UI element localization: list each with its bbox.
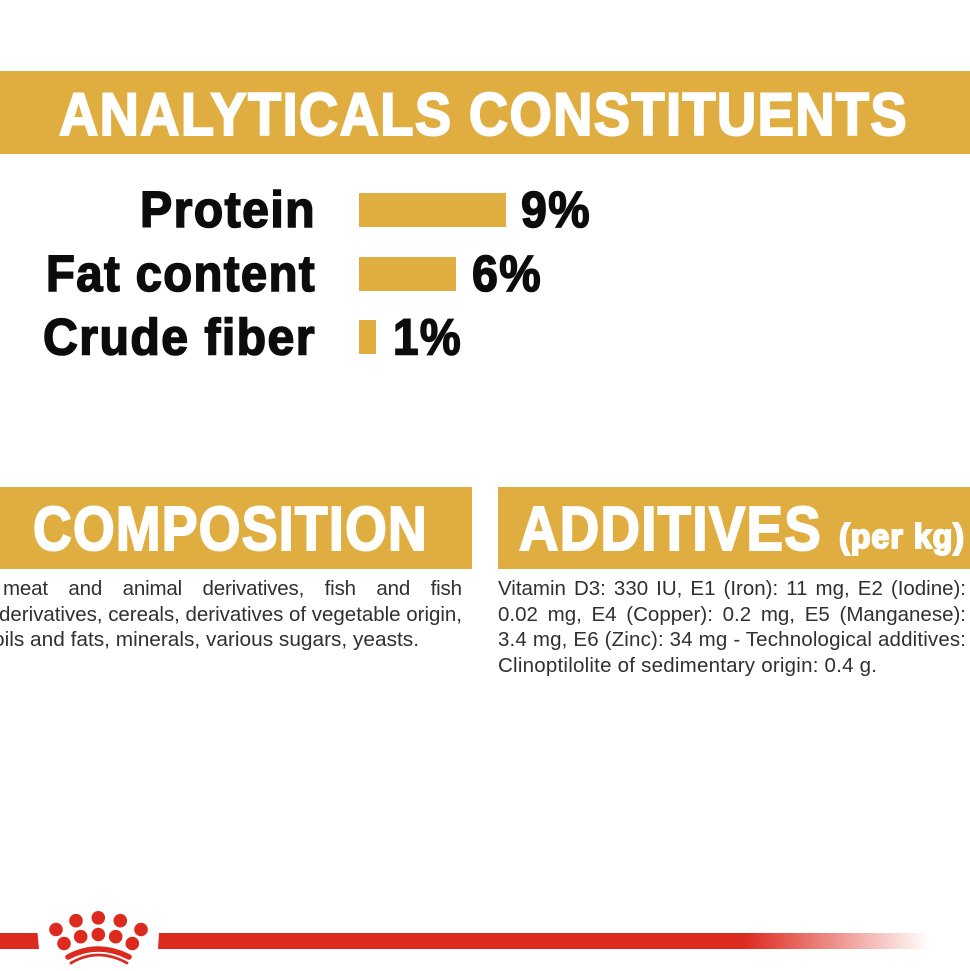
bar chart: constituents — [43, 181, 591, 366]
row: crude fiber — [43, 308, 462, 366]
text block: additives — [498, 577, 966, 677]
panel: composition header band — [0, 487, 472, 569]
row: fat content: 6% — [472, 245, 542, 302]
footer red line: left — [0, 933, 39, 949]
text block: composition: derivatives, cereals, derivatives of vegetable origin, — [0, 603, 462, 626]
row: protein: Protein — [140, 181, 316, 238]
text block: composition: meat and animal derivatives, fish and fish — [3, 577, 462, 600]
heading: composition: COMPOSITION — [33, 495, 428, 564]
row: protein: 9% — [521, 181, 591, 238]
text block: composition: oils and fats, minerals, various sugars, yeasts. — [0, 628, 419, 651]
heading: analyticals constituents: ANALYTICALS CONSTITUENTS — [59, 81, 908, 148]
row: fat content — [46, 245, 542, 302]
icon: royal canin crown logo — [49, 911, 148, 963]
row: fat content: Fat content — [46, 245, 316, 302]
text block: additives: 0.02 mg, E4 (Copper): 0.2 mg, E5 (Manganese): — [498, 603, 966, 626]
text block: additives: 3.4 mg, E6 (Zinc): 34 mg - Technological additives: — [498, 628, 966, 651]
text block: additives: Vitamin D3: 330 IU, E1 (Iron): 11 mg, E2 (Iodine): — [498, 577, 966, 600]
heading: additives: ADDITIVES — [519, 495, 822, 564]
panel: additives header band — [498, 487, 970, 569]
text block: additives: Clinoptilolite of sedimentary origin: 0.4 g. — [498, 654, 877, 677]
row: protein — [140, 181, 591, 238]
row: crude fiber: 1% — [393, 308, 462, 366]
text block: composition — [0, 577, 462, 651]
heading: per kg: (per kg) — [839, 518, 965, 556]
row: crude fiber: Crude fiber — [43, 308, 316, 366]
footer red line: right fading — [158, 933, 930, 949]
panel: analyticals constituents header band — [0, 71, 970, 154]
